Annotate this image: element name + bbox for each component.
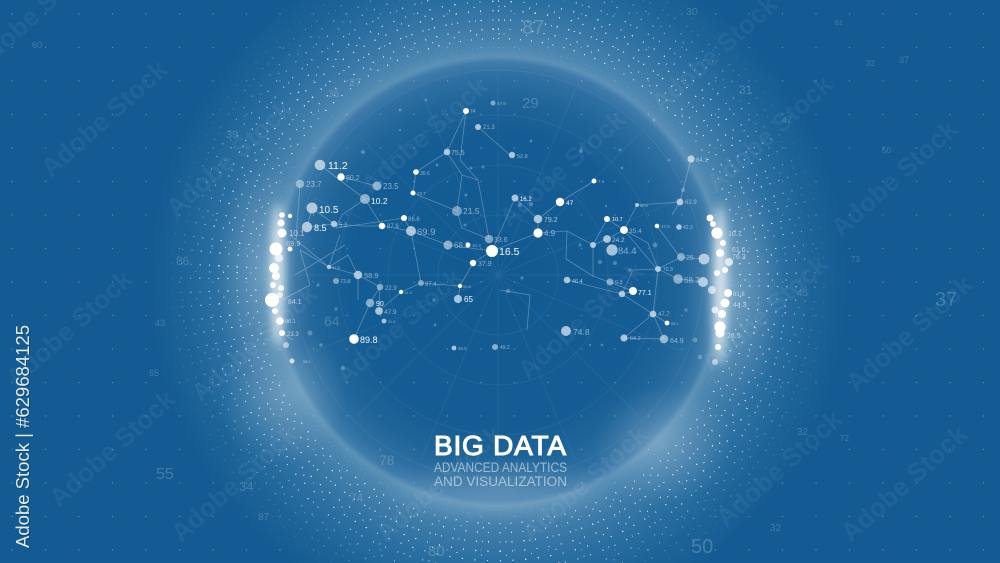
left hemisphere nodes: 74: [470, 109, 476, 115]
outer floating numbers: 61: [835, 20, 843, 27]
left hemisphere nodes: 50.8: [463, 284, 472, 289]
network links: [282, 111, 703, 340]
outer floating numbers: 50: [691, 536, 713, 558]
right hemisphere nodes: 47.7: [658, 312, 670, 318]
left hemisphere nodes: 22.9: [385, 286, 397, 292]
right hemisphere nodes: 62.9: [685, 200, 697, 206]
outer floating numbers: 74: [350, 491, 364, 505]
watermark: Adobe Stock: [185, 279, 323, 408]
right hemisphere nodes: 74.8: [573, 327, 590, 337]
left hemisphere nodes: 46.5: [458, 346, 467, 351]
watermark: Adobe Stock: [825, 114, 963, 243]
outer floating numbers: 37: [899, 55, 909, 65]
left hemisphere nodes: 97.4: [425, 282, 437, 288]
left hemisphere nodes: 58.9: [364, 271, 379, 280]
right hemisphere nodes: 79.2: [544, 217, 558, 224]
outer floating numbers: 32: [797, 427, 809, 438]
right hemisphere nodes: 10.7: [612, 217, 623, 223]
watermark: Adobe Stock: [515, 419, 653, 548]
right hemisphere nodes: 47.6: [661, 224, 670, 229]
outer floating numbers: 39: [226, 129, 238, 141]
watermark: Adobe Stock: [700, 69, 838, 198]
left hemisphere nodes: 10.2: [371, 196, 388, 206]
outer floating numbers: 87: [258, 512, 270, 523]
left hemisphere nodes: 33.7: [417, 191, 426, 196]
right rim cluster nodes: [706, 214, 747, 365]
watermark: Adobe Stock: [493, 104, 631, 233]
right hemisphere nodes: 9.3: [615, 280, 623, 286]
subheading: [434, 460, 567, 489]
globe grid: [293, 70, 703, 480]
right hemisphere nodes: 84.4: [618, 246, 636, 257]
outer floating numbers: 47: [782, 115, 792, 125]
left rim cluster nodes: 69.9: [286, 239, 301, 248]
right hemisphere nodes: 58.1: [671, 321, 680, 326]
left hemisphere nodes: 16.5: [499, 246, 520, 258]
watermark: Adobe Stock: [835, 419, 973, 548]
watermark: Adobe Stock: [330, 262, 468, 391]
right hemisphere nodes: 70.3: [663, 267, 673, 273]
heading: BIG DATA: [434, 430, 566, 461]
outer floating numbers: 60: [32, 40, 42, 50]
left hemisphere nodes: 23.5: [383, 182, 399, 191]
faint scattered dots: [308, 99, 702, 370]
left hemisphere nodes: 11.2: [328, 160, 348, 172]
left hemisphere nodes: 65: [464, 295, 473, 304]
right hemisphere nodes: 47: [566, 200, 574, 207]
outer floating numbers: 55: [156, 466, 174, 483]
left hemisphere nodes: 80.2: [346, 175, 360, 182]
left hemisphere nodes: 10.5: [319, 205, 339, 216]
watermark: Adobe Stock: [355, 71, 493, 200]
outer floating numbers: 29: [522, 95, 539, 112]
right hemisphere nodes: 7.4: [598, 179, 605, 184]
outer floating numbers: 31: [739, 83, 753, 97]
right hemisphere nodes: 16.2: [520, 197, 532, 203]
left hemisphere nodes: 72.8: [340, 279, 351, 285]
right hemisphere nodes: 86.6: [640, 203, 649, 208]
left hemisphere nodes: 14.4: [404, 290, 413, 295]
left hemisphere nodes: 21.5: [463, 206, 480, 216]
right hemisphere nodes: 64.2: [630, 336, 641, 342]
outer floating numbers: 43: [155, 318, 165, 328]
right hemisphere nodes: 35.4: [629, 228, 642, 235]
watermark: Adobe Stock: [43, 384, 181, 513]
right hemisphere nodes: 52.8: [517, 154, 528, 160]
left hemisphere nodes: 81.5: [332, 265, 341, 270]
left hemisphere nodes: 8.5: [314, 223, 327, 233]
outer floating numbers: 78: [379, 452, 395, 468]
left hemisphere nodes: 37.9: [478, 261, 492, 268]
data nodes: [265, 100, 747, 365]
left rim cluster nodes: [265, 212, 312, 364]
outer floating numbers: 72: [840, 434, 849, 443]
watermark: Adobe Stock: [35, 54, 173, 183]
left hemisphere nodes: 5.2: [339, 223, 348, 229]
left rim cluster nodes: 10.1: [289, 229, 305, 238]
left hemisphere nodes: 11.8: [388, 319, 396, 324]
outer floating numbers: 30: [686, 6, 698, 18]
right rim cluster nodes: 81.6: [733, 292, 745, 298]
left hemisphere nodes: 33.6: [494, 237, 508, 244]
left hemisphere nodes: 87.8: [387, 224, 399, 230]
subheading: ADVANCED ANALYTICS: [434, 460, 567, 475]
left hemisphere nodes: 68.8: [454, 241, 470, 250]
right hemisphere nodes: 84.1: [696, 158, 708, 164]
right hemisphere nodes: 24.2: [612, 237, 625, 244]
watermark: Adobe Stock: [710, 404, 848, 533]
left hemisphere nodes: 86.6: [408, 217, 420, 223]
watermark: Adobe Stock: [840, 269, 978, 398]
left hemisphere nodes: 90: [376, 301, 384, 308]
left hemisphere nodes: 23.7: [306, 180, 322, 189]
right hemisphere nodes: 64.9: [670, 338, 684, 345]
left rim cluster nodes: 96.1: [285, 319, 296, 325]
stock id side label: Adobe Stock | #629684125: [14, 326, 34, 549]
outer floating numbers: 50: [882, 146, 891, 155]
watermark: Adobe Stock: [695, 249, 833, 378]
outer floating numbers: 27: [349, 77, 361, 89]
right rim cluster nodes: 76.3: [732, 254, 746, 261]
right rim cluster nodes: 10.7: [728, 231, 742, 238]
radial dotted spokes, offset: [182, 0, 814, 563]
outer floating numbers: 64: [324, 313, 340, 329]
outer floating numbers: 34: [239, 479, 253, 494]
subheading: AND VISUALIZATION: [434, 474, 567, 489]
outer floating numbers: 86: [176, 254, 190, 268]
outer floating numbers: 45: [797, 288, 809, 299]
left hemisphere nodes: 47.9: [384, 309, 397, 316]
left hemisphere nodes: [296, 100, 520, 351]
left hemisphere nodes: 89.8: [360, 335, 378, 345]
outer floating numbers: 80: [428, 543, 445, 560]
outer floating numbers: 32: [770, 523, 782, 534]
watermark: Adobe Stock: [370, 419, 508, 548]
watermark: Adobe Stock: [512, 256, 650, 385]
left rim cluster nodes: 23.3: [287, 332, 299, 338]
outer floating numbers: 37: [935, 289, 957, 311]
left hemisphere nodes: 36.6: [420, 171, 430, 177]
left hemisphere nodes: 10.3: [472, 243, 481, 248]
bright rim clusters: [271, 203, 727, 365]
right hemisphere nodes: 46.4: [572, 279, 583, 285]
right hemisphere nodes: 68.7: [684, 276, 700, 285]
right hemisphere nodes: 25: [686, 255, 694, 262]
watermark: Adobe Stock: [165, 419, 303, 548]
outer floating numbers: 36: [328, 89, 340, 100]
radial dotted spokes: [171, 0, 824, 563]
outer floating numbers: 65: [149, 368, 159, 378]
outer floating numbers: 32: [866, 59, 875, 68]
left hemisphere nodes: 47.9: [497, 101, 506, 106]
right hemisphere nodes: 42.3: [683, 225, 693, 231]
left rim cluster nodes: 58.1: [303, 359, 312, 364]
left hemisphere nodes: 69.9: [417, 227, 436, 238]
outer floating numbers: 87: [522, 17, 544, 39]
right rim cluster nodes: 26.5: [727, 333, 741, 340]
left rim cluster nodes: 84.1: [288, 299, 302, 306]
right hemisphere nodes: 4.9: [544, 229, 556, 238]
title: big data: [434, 430, 567, 489]
left hemisphere nodes: 49.2: [500, 345, 510, 351]
right rim cluster nodes: 44.3: [733, 302, 747, 309]
watermark: Adobe Stock: [160, 94, 298, 223]
outer floating numbers: 73: [851, 255, 860, 264]
stock id side label: Adobe Stock | #629684125: [13, 325, 33, 548]
left hemisphere nodes: 21.3: [483, 125, 495, 131]
left hemisphere nodes: 75.5: [451, 150, 465, 157]
right rim cluster nodes: 61.6: [732, 247, 746, 254]
right hemisphere nodes: 77.1: [638, 290, 652, 297]
watermark: Adobe Stock: [0, 264, 138, 393]
right hemisphere nodes: [509, 152, 709, 345]
